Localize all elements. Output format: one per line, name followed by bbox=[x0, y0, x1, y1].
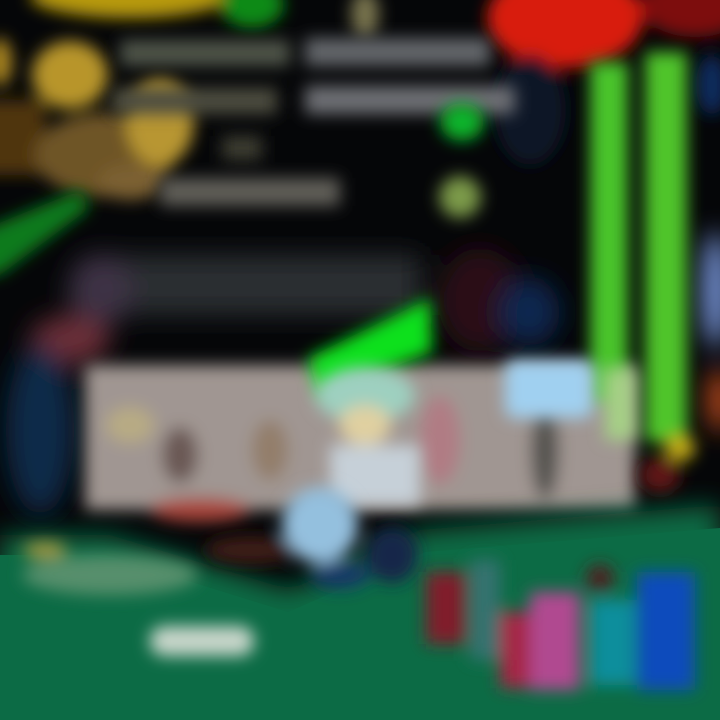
panel: top banner shapes bbox=[30, 0, 720, 165]
chart: coloured chip stacks bbox=[426, 560, 695, 690]
icon: green dots bbox=[439, 103, 484, 218]
text block: pale labels on green bbox=[22, 542, 254, 656]
chart: green vertical bars bbox=[590, 52, 695, 493]
panel: white table bbox=[85, 365, 635, 522]
icon: gold coins bbox=[0, 38, 194, 200]
icon: green arrow bbox=[308, 298, 432, 395]
icon: blue figure base bbox=[205, 487, 418, 589]
icon: light blue figure bbox=[315, 360, 593, 505]
text block: dim subheading bbox=[6, 232, 720, 515]
icon: green ribbon bbox=[0, 190, 90, 275]
heading: blurred title lines bbox=[112, 38, 515, 206]
panel: green table base bbox=[0, 505, 720, 720]
